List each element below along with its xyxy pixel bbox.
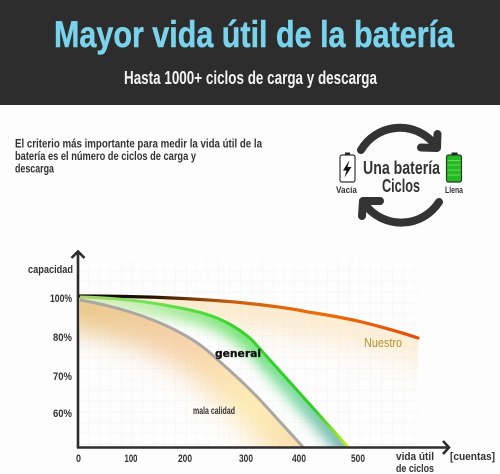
cycle diagram [336,128,464,223]
subtitle: Hasta 1000+ ciclos de carga y descarga [124,68,378,88]
y axis arrow [72,252,84,448]
area under our battery curve [60,296,440,345]
curve: general [80,297,348,447]
intro text block: descarga [15,164,54,176]
y axis tick labels [50,293,72,420]
x axis unit: [cuentas] [450,451,495,463]
x axis tick labels: 500 [351,453,365,465]
y axis tick labels: 70% [53,371,72,383]
y axis tick labels: 100% [50,293,72,305]
x axis title: vida útil [396,451,434,463]
arrow: top arc, empty to full [361,128,438,150]
x axis tick labels: 200 [178,453,192,465]
x axis tick labels [76,453,365,465]
area under low quality curve [80,302,300,446]
y axis tick labels: 60% [53,408,72,420]
label: empty: Vacía [336,185,358,196]
x axis tick labels: 0 [76,453,81,465]
label: full: Llena [445,185,464,196]
header banner [0,0,500,105]
series label: low quality: mala calidad [193,406,235,417]
y axis title: capacidad [28,264,73,276]
arrow: bottom arc, full to empty [362,201,439,223]
intro text block: El criterio más importante para medir la vida útil de la [15,138,262,150]
curve: ours [80,296,418,338]
series label: general: general [215,347,261,360]
chart: capacity vs cycle life [28,252,495,474]
x axis arrow [77,441,449,454]
series label: ours: Nuestro [364,335,402,350]
icon: full battery [446,152,462,182]
x axis title [396,451,434,474]
area under general curve [80,298,346,446]
x axis tick labels: 100 [124,453,138,465]
y axis tick labels: 80% [53,332,72,344]
x axis tick labels: 300 [239,453,253,465]
curve: low quality [80,300,303,447]
icon: empty battery [340,152,355,182]
x axis tick labels: 400 [292,453,306,465]
label: cycles: Ciclos [382,176,420,196]
intro text block: batería es el número de ciclos de carga y [15,151,196,163]
chart grid [78,260,420,447]
label: one battery: Una batería [363,158,441,178]
intro text block [15,138,262,176]
